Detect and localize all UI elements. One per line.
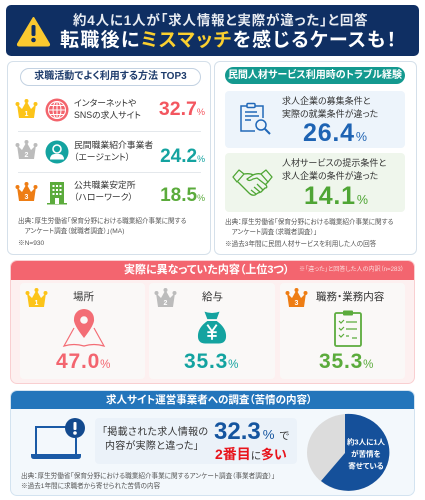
- note: sample size: ※「違った」と回答した人の内訳（n=283）: [299, 266, 404, 273]
- pie label: が苦情を: [351, 448, 381, 458]
- crown rank 1: 1: [35, 300, 39, 307]
- value: 24.2%: 24.2%: [160, 146, 205, 167]
- source note: [21, 472, 275, 490]
- quote text: 内容が実際と違った」: [105, 441, 199, 452]
- icon: checklist: [334, 310, 362, 347]
- header banner: [6, 5, 419, 56]
- crown rank 3: [286, 288, 308, 307]
- value: 14.1%: 14.1%: [304, 182, 369, 210]
- crown rank 3: [16, 182, 38, 201]
- icon: globe: [46, 98, 68, 122]
- text: service conditions: 求人企業の条件が違った: [282, 170, 378, 180]
- source note: ※過去1年間に求職者から寄せられた苦情の内容: [21, 483, 160, 490]
- value: 32.3%: 32.3% で: [214, 418, 289, 445]
- heading bar: [10, 390, 415, 409]
- panel: private HR service troubles: [214, 61, 417, 255]
- source note: ※N=930: [18, 240, 44, 247]
- crown rank 2: [16, 140, 38, 159]
- source note: 出典：厚生労働省「保育分野における職業紹介事業に関するアンケート調査（事業者調査）」: [21, 473, 275, 480]
- quote text: [102, 426, 208, 452]
- heading: top 3 methods: 求職活動でよく利用する方法 TOP3: [34, 71, 187, 82]
- source note: 出典：厚生労働省「保育分野における職業紹介事業に関する: [18, 218, 187, 225]
- label: public employment office: [74, 180, 136, 202]
- value: 35.3%: 35.3%: [319, 350, 374, 373]
- value: 32.7%: 32.7%: [159, 98, 205, 120]
- panel: job search methods: [7, 61, 211, 255]
- label: internet: インターネットや: [74, 98, 136, 108]
- pie chart: [307, 414, 390, 491]
- label: internet: [74, 98, 141, 120]
- crown rank 1: [26, 288, 48, 307]
- value: 35.3%: 35.3%: [184, 350, 239, 373]
- label: agent: [74, 140, 153, 162]
- card: job conditions differ: [225, 91, 405, 148]
- panel: job site operator survey: [10, 390, 415, 496]
- crown rank 2: 2: [164, 300, 168, 307]
- value: 47.0%: 47.0%: [56, 350, 111, 373]
- crown rank 1: [16, 99, 38, 118]
- icon: yen money bag: [198, 312, 226, 344]
- value: 18.5%: 18.5%: [160, 185, 205, 206]
- text: service conditions: 人材サービスの提示条件と: [282, 158, 386, 168]
- text: recruitment conditions: 求人企業の募集条件と: [282, 96, 371, 106]
- heading bar: [10, 260, 415, 280]
- source note: [18, 217, 187, 247]
- crown rank 2: [154, 288, 176, 307]
- label: location: 場所: [73, 291, 94, 303]
- icon: warning triangle: [16, 17, 50, 46]
- card: service conditions differ: [225, 153, 405, 212]
- label: agent: （エージェント）: [74, 152, 130, 162]
- heading: top 3 methods: [20, 68, 201, 86]
- crown rank 1: 1: [25, 111, 29, 118]
- source note: アンケート調査（就職者調査）」(MA): [25, 228, 124, 235]
- text: recruitment conditions: 実際の就業条件が違った: [282, 108, 378, 118]
- label: salary: 給与: [202, 291, 223, 303]
- source note: [225, 218, 394, 248]
- title line 1: 約4人に1人が「求人情報と実際が違った」と回答: [73, 13, 368, 28]
- heading text: 求人サイト運営事業者への調査（苦情の内容）: [106, 394, 312, 406]
- source note: ※過去3年間に民間人材サービスを利用した人の回答: [225, 241, 376, 248]
- card: callout: [95, 418, 297, 464]
- value: 26.4%: 26.4%: [303, 119, 368, 147]
- heading: trouble experience: [225, 67, 405, 84]
- source note: アンケート調査（求職者調査）」: [232, 229, 317, 236]
- label: public employment office: 公共職業安定所: [74, 180, 136, 190]
- icon: building: [47, 182, 67, 204]
- card: location: [20, 283, 145, 379]
- text: service conditions: [282, 158, 386, 180]
- icon: handshake: [232, 169, 273, 196]
- crown rank 3: 3: [295, 300, 299, 307]
- heading: trouble experience: 民間人材サービス利用時のトラブル経験: [228, 70, 402, 81]
- callout: second most: 2番目に多い: [215, 446, 287, 462]
- label: public employment office: （ハローワーク）: [74, 192, 133, 202]
- title line 2: 転職後にミスマッチを感じるケースも！: [60, 30, 397, 51]
- panel: actual differences top 3: [10, 260, 415, 384]
- pie label: 寄せている: [348, 460, 384, 470]
- icon: map pin: [62, 309, 106, 347]
- crown rank 3: 3: [25, 194, 29, 201]
- card: salary: [149, 283, 275, 379]
- text: recruitment conditions: [282, 96, 378, 118]
- icon: clipboard with magnifier: [240, 102, 271, 135]
- icon: person: [46, 140, 68, 164]
- crown rank 2: 2: [25, 152, 29, 159]
- label: agent: 民間職業紹介事業者: [74, 140, 153, 150]
- label: duties: 職務・業務内容: [316, 291, 384, 303]
- card: duties: [280, 283, 405, 379]
- label: internet: SNSの求人サイト: [74, 110, 141, 120]
- heading text: 実際に異なっていた内容（上位3つ）: [124, 264, 289, 276]
- source note: 出典：厚生労働省「保育分野における職業紹介事業に関する: [225, 219, 394, 226]
- quote text: 「掲載された求人情報の: [102, 427, 208, 438]
- icon: laptop with alert: [31, 418, 85, 459]
- pie label: 約3人に1人: [347, 436, 386, 446]
